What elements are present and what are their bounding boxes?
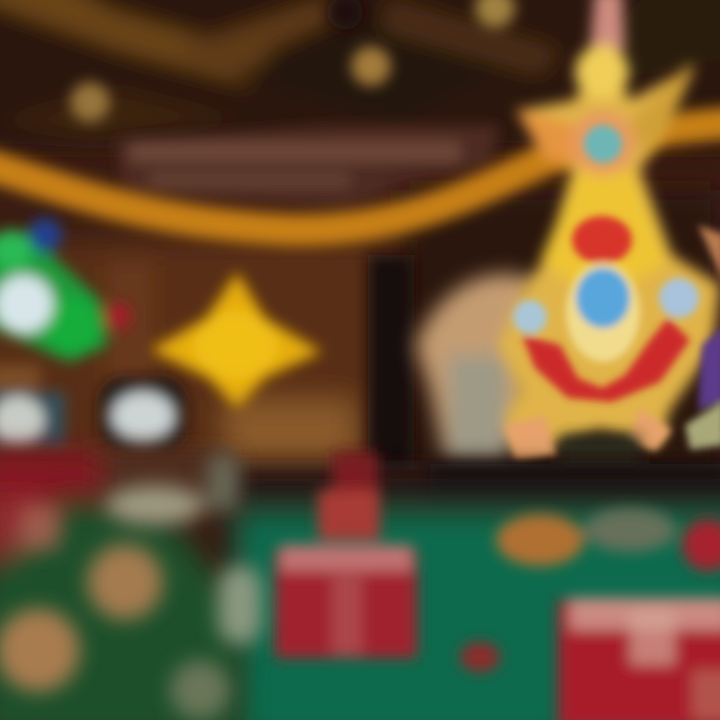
ceiling <box>0 0 720 150</box>
stage shelf <box>430 435 720 498</box>
foreground tree and baubles <box>0 455 262 720</box>
ornament body <box>498 0 720 455</box>
ornament jewels <box>505 125 720 460</box>
beige figure behind ornament <box>415 274 535 460</box>
left red and dark foreground <box>0 452 245 720</box>
green decoration <box>0 218 131 362</box>
large ornament <box>498 0 720 460</box>
golden ribbon <box>0 122 720 230</box>
sign panel behind ribbon <box>115 125 500 208</box>
ceiling lights <box>70 0 515 122</box>
green felt table <box>200 470 720 720</box>
gift box centre <box>275 452 417 658</box>
dark column <box>368 255 414 470</box>
gift box right <box>558 598 720 720</box>
lower left screens <box>0 365 185 450</box>
mid wall <box>0 190 720 470</box>
yellow star <box>150 272 322 408</box>
table items <box>460 508 720 672</box>
